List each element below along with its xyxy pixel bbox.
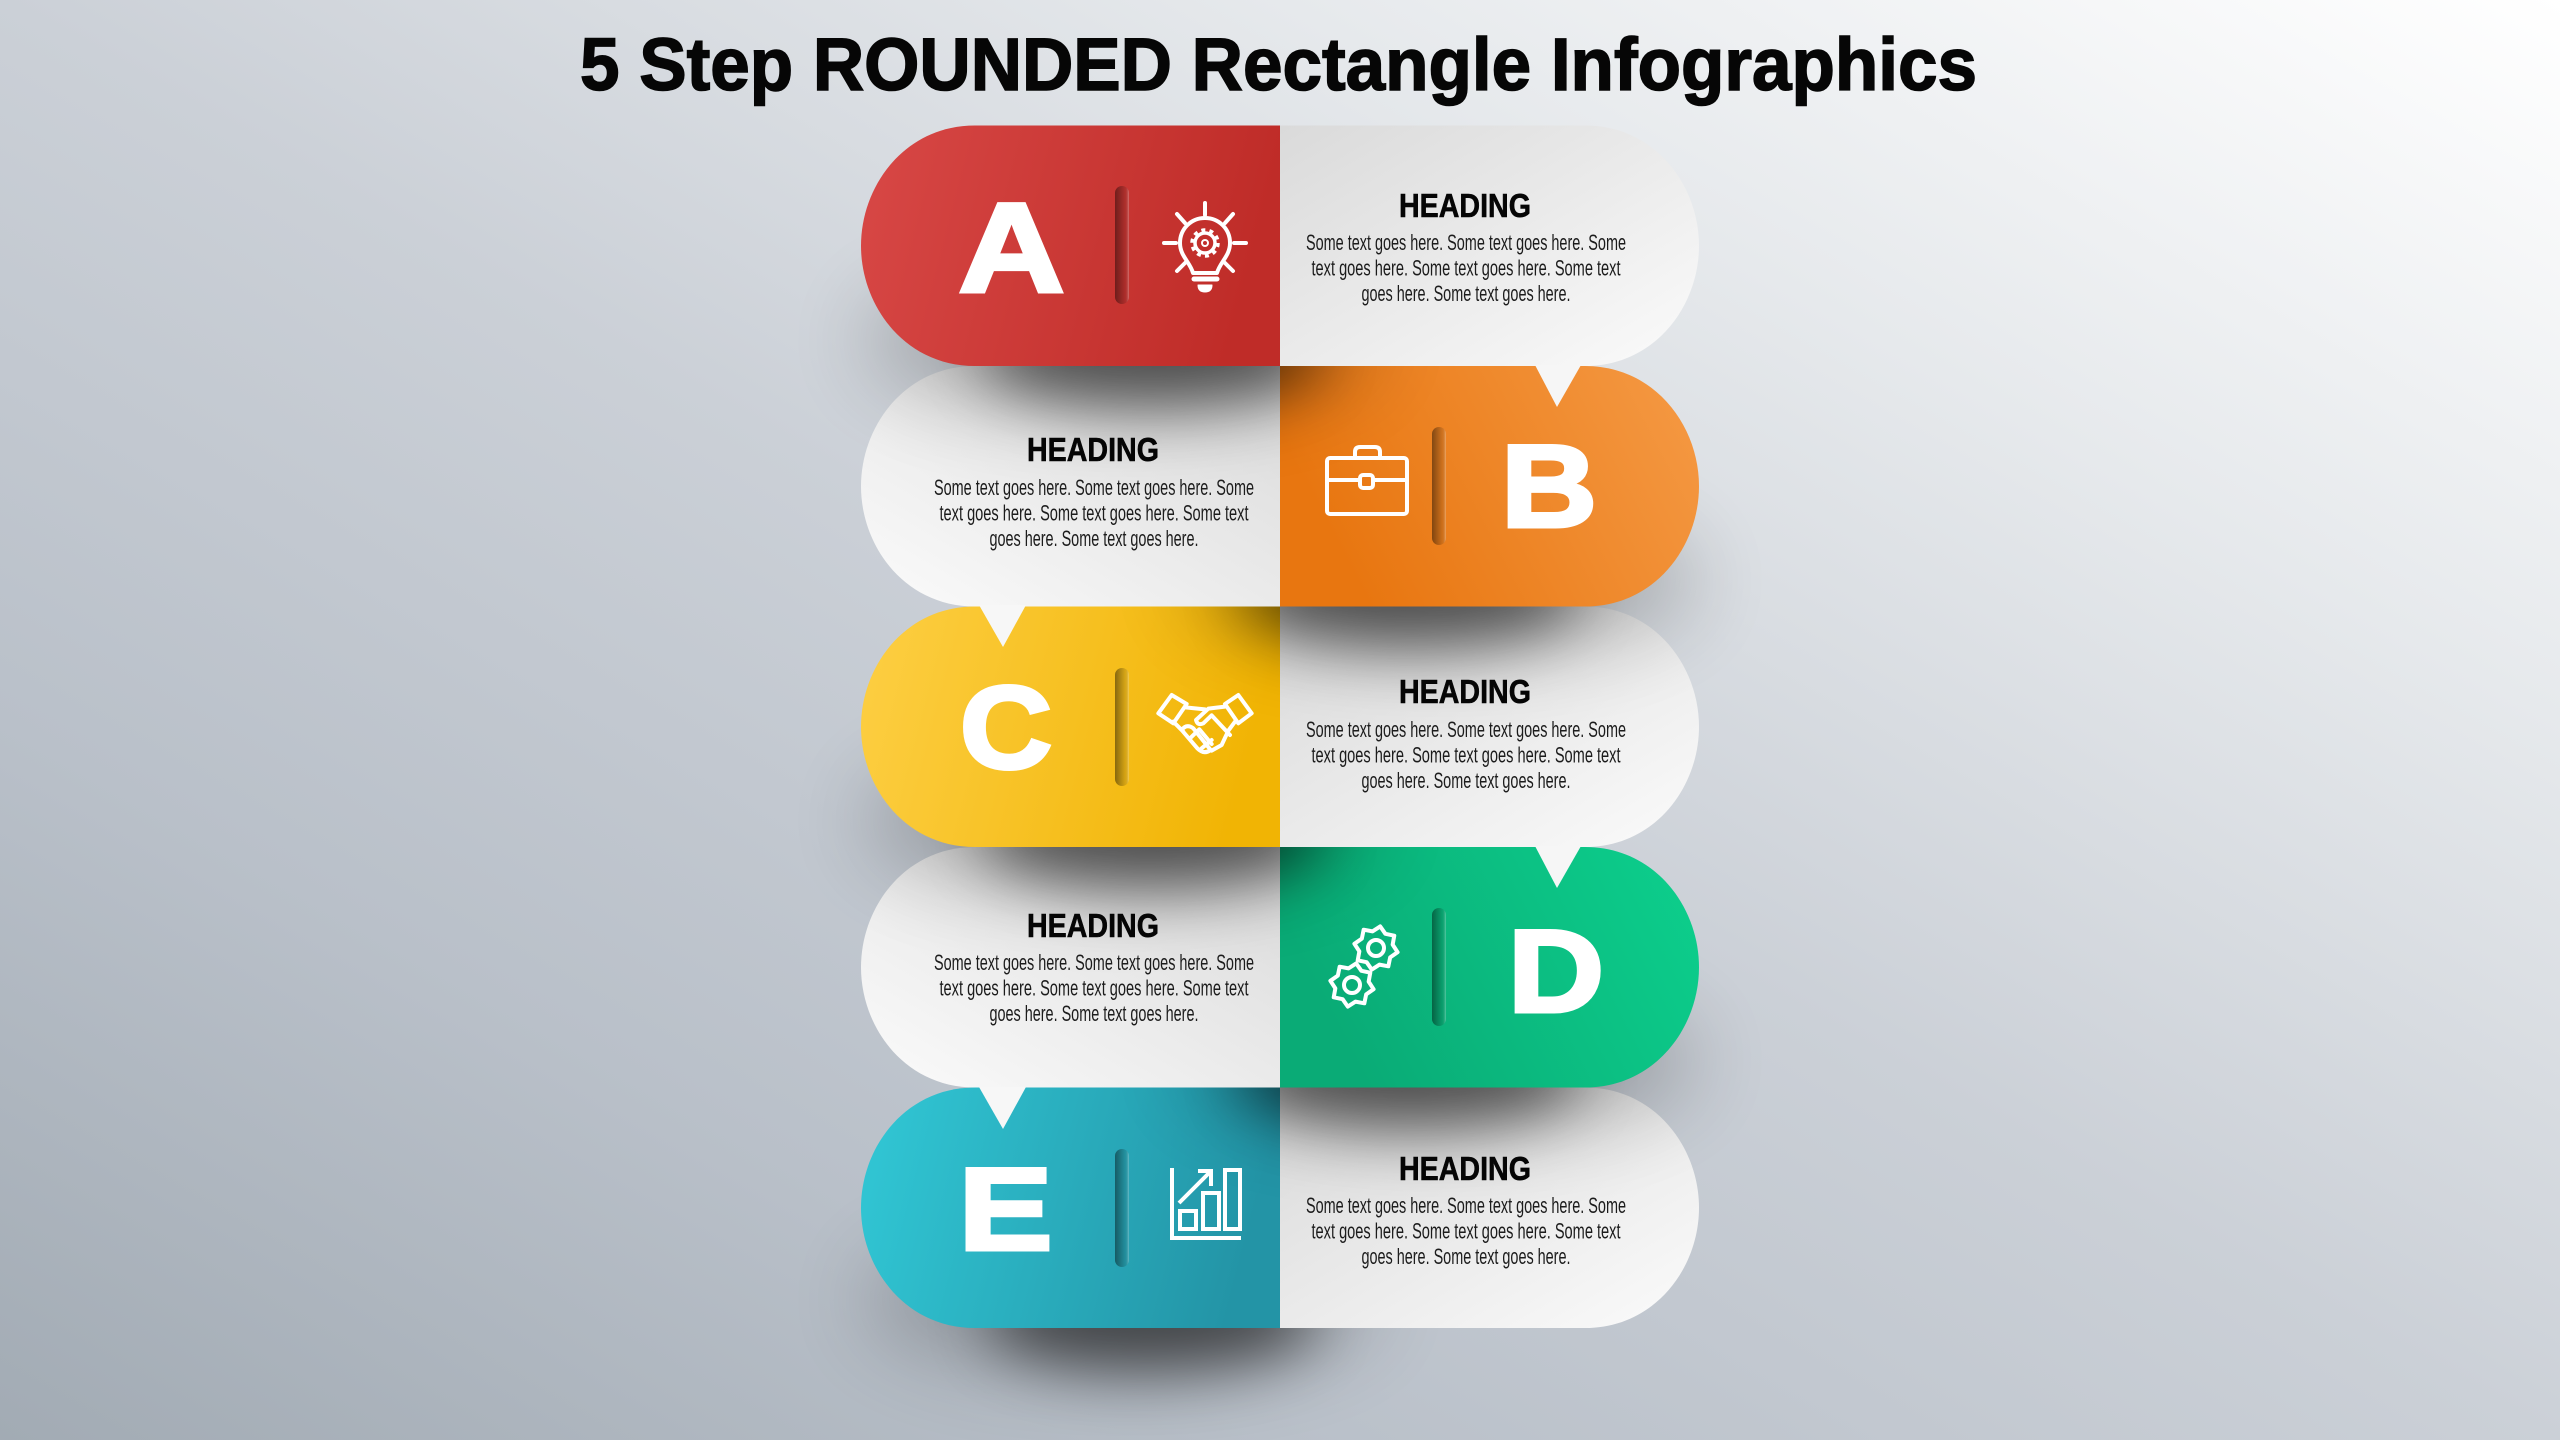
body E xyxy=(1306,1193,1626,1269)
row C text half xyxy=(1280,606,1699,847)
callout tail: row C to D xyxy=(1535,846,1581,888)
body B: text goes here. Some text goes here. Some text xyxy=(940,500,1248,526)
shadow: under row C xyxy=(865,748,1375,892)
row B colour half xyxy=(1280,366,1699,606)
body B xyxy=(934,475,1254,551)
body D: goes here. Some text goes here. xyxy=(990,1001,1198,1026)
body C: text goes here. Some text goes here. Some text xyxy=(1312,742,1620,768)
shadow: under row D xyxy=(1185,988,1695,1132)
heading A: HEADING xyxy=(1399,187,1531,224)
text block B xyxy=(934,431,1254,551)
divider slot C xyxy=(1115,668,1129,786)
row D colour half xyxy=(1280,847,1699,1088)
body E: goes here. Some text goes here. xyxy=(1362,1244,1570,1269)
text block A xyxy=(1306,187,1626,306)
row B pill xyxy=(861,366,1699,606)
body A: Some text goes here. Some text goes here. Some xyxy=(1306,230,1626,255)
row B text half xyxy=(861,366,1280,606)
shadow: under row A xyxy=(865,268,1375,412)
body C xyxy=(1306,717,1626,793)
row A text half xyxy=(1280,126,1699,366)
letter B: B xyxy=(1501,420,1597,552)
callout tail: row B to C xyxy=(979,605,1026,647)
callout tail: row D to E xyxy=(979,1087,1026,1129)
icon: handshake xyxy=(1158,695,1252,752)
text block E xyxy=(1306,1150,1626,1269)
letter D: D xyxy=(1508,906,1604,1036)
row D pill xyxy=(861,847,1699,1088)
heading B: HEADING xyxy=(1027,431,1159,468)
heading E: HEADING xyxy=(1399,1150,1531,1187)
shadow: under row E xyxy=(865,1228,1375,1372)
row E colour half xyxy=(861,1088,1280,1328)
body D: Some text goes here. Some text goes here. Some xyxy=(934,950,1254,975)
icon: light bulb with gear xyxy=(1164,203,1246,292)
divider slot A xyxy=(1115,186,1129,304)
body B: Some text goes here. Some text goes here. Some xyxy=(934,475,1254,500)
divider slot B xyxy=(1432,427,1446,545)
row E text half xyxy=(1280,1088,1699,1328)
letter A: A xyxy=(958,176,1064,318)
body E: Some text goes here. Some text goes here. Some xyxy=(1306,1193,1626,1218)
row A pill xyxy=(861,126,1699,366)
callout tail: row A to B xyxy=(1535,365,1581,407)
body D: text goes here. Some text goes here. Some text xyxy=(940,976,1248,1000)
row C pill xyxy=(861,606,1699,847)
row A colour half xyxy=(861,126,1280,366)
body D xyxy=(934,950,1254,1026)
text block C xyxy=(1306,673,1626,793)
text block D xyxy=(934,907,1254,1026)
icon: gears xyxy=(1326,922,1402,1011)
body C: goes here. Some text goes here. xyxy=(1362,768,1570,793)
body A: goes here. Some text goes here. xyxy=(1362,281,1570,306)
row D text half xyxy=(861,847,1280,1088)
icon: briefcase xyxy=(1327,447,1407,514)
letter E: E xyxy=(958,1144,1052,1274)
body A xyxy=(1306,230,1626,306)
icon: growth chart xyxy=(1172,1168,1241,1238)
shadow: under row B xyxy=(1185,508,1695,652)
body B: goes here. Some text goes here. xyxy=(990,526,1198,551)
heading D: HEADING xyxy=(1027,907,1159,944)
heading C: HEADING xyxy=(1399,673,1531,710)
body E: text goes here. Some text goes here. Some text xyxy=(1312,1218,1620,1244)
letter C: C xyxy=(960,662,1052,793)
body A: text goes here. Some text goes here. Some text xyxy=(1312,256,1620,280)
title: 5 Step ROUNDED Rectangle Infographics xyxy=(580,23,1977,106)
divider slot E xyxy=(1115,1149,1129,1267)
row E pill xyxy=(861,1088,1699,1328)
divider slot D xyxy=(1432,908,1446,1026)
row C colour half xyxy=(861,606,1280,847)
body C: Some text goes here. Some text goes here. Some xyxy=(1306,717,1626,742)
